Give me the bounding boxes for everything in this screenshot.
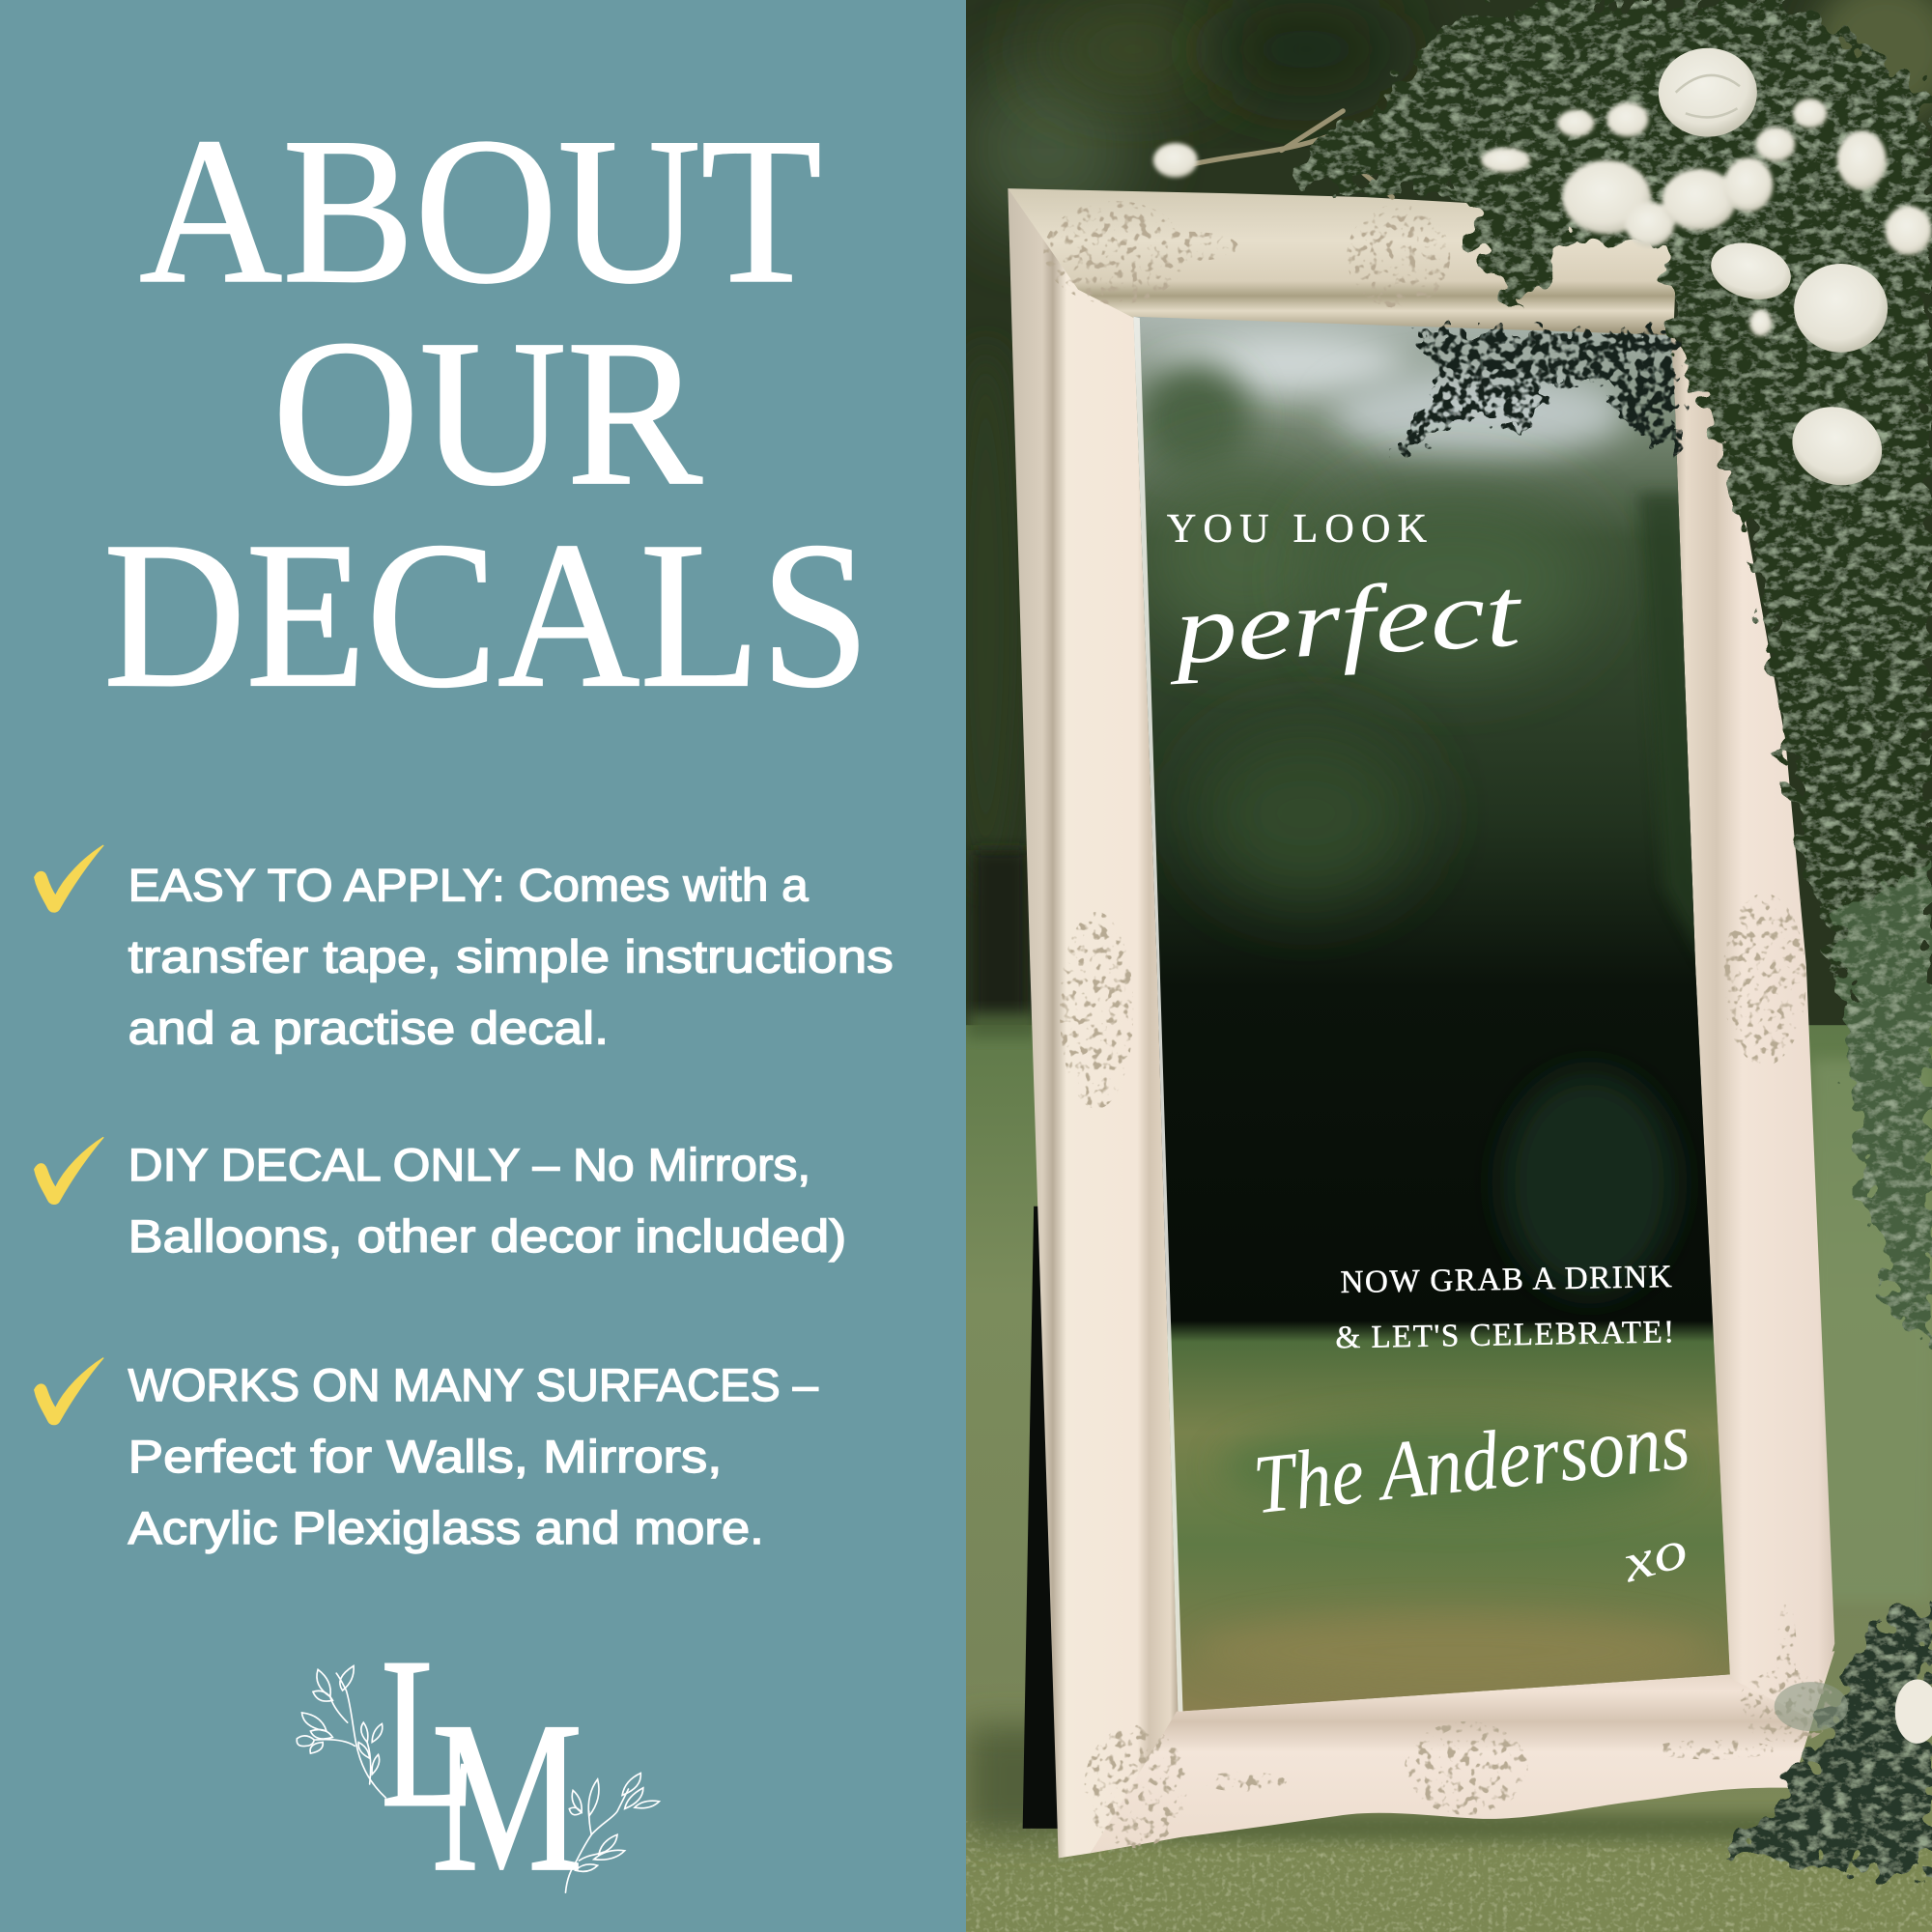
- decal: now grab a drink: NOW GRAB A DRINK: [1340, 1259, 1672, 1300]
- flower: pale rose upper: [1705, 235, 1797, 308]
- photo background: trees: [949, 0, 1932, 1109]
- logo sprig: left: [297, 1665, 385, 1798]
- frame right rail: [1665, 327, 1834, 1719]
- branch reflection in mirror: [1390, 330, 1678, 462]
- icon: yellow check 3: [35, 1358, 103, 1425]
- title: about our decals: ABOUT: [139, 95, 822, 327]
- icon: yellow check 2: [35, 1137, 103, 1204]
- feature text: easy to apply: EASY TO APPLY: Comes with a: [128, 860, 810, 911]
- panel: left teal background: [0, 0, 966, 1932]
- flower: rose lower: [1781, 394, 1893, 497]
- hanging fronds: [1836, 863, 1932, 1343]
- feature text: works on many surfaces: [128, 1360, 819, 1554]
- decal: the andersons script: The Andersons: [1249, 1393, 1693, 1531]
- mirror decal text: [1165, 506, 1694, 1595]
- easel shadow behind the mirror: [1022, 1206, 1058, 1829]
- feature text: easy to apply: [128, 860, 894, 1054]
- title: about our decals: [103, 95, 870, 730]
- flower: large rose: [1659, 48, 1757, 137]
- feature text: works on many surfaces: Acrylic Plexiglass and more.: [128, 1503, 764, 1554]
- feature text: works on many surfaces: Perfect for Walls, Mirrors,: [128, 1432, 722, 1483]
- feature text: works on many surfaces: WORKS ON MANY SURFACES –: [128, 1360, 819, 1411]
- photo background: grass: [966, 1012, 1932, 1932]
- foliage: ground plant bottom right: [1725, 1602, 1932, 1873]
- frame bottom rail: [1091, 1651, 1834, 1853]
- feature list: [35, 845, 894, 1554]
- decal: you look: YOU LOOK: [1167, 506, 1427, 552]
- mirror glass reflection: [1133, 317, 1730, 1712]
- decal: let's celebrate: & LET'S CELEBRATE!: [1335, 1314, 1675, 1355]
- flower: rose middle: [1794, 264, 1888, 353]
- decal: perfect script: perfect: [1165, 557, 1525, 686]
- mirror frame: [1008, 188, 1834, 1858]
- feature text: diy decal only: DIY DECAL ONLY – No Mirrors,: [128, 1140, 810, 1191]
- frame top rail: [1008, 188, 1678, 337]
- flowers: small blooms: [1153, 99, 1932, 336]
- garland leaf mass: [1293, 0, 1932, 985]
- foliage: garland over frame corner: [1153, 0, 1932, 1343]
- feature text: diy decal only: [128, 1140, 846, 1263]
- icon: yellow check 1: [35, 845, 103, 912]
- logo: LM monogram with sprigs: [297, 1614, 659, 1917]
- frame ornaments: [1043, 201, 1836, 1848]
- feature text: easy to apply: transfer tape, simple instructions: [128, 931, 894, 982]
- decal: xo: xo: [1615, 1519, 1694, 1595]
- feature text: diy decal only: Balloons, other decor included): [128, 1211, 846, 1263]
- garland stems reaching left: [1182, 99, 1441, 197]
- photo: mirror scene: [949, 0, 1932, 1932]
- logo letter M: M: [431, 1678, 582, 1917]
- title: about our decals: DECALS: [103, 498, 870, 730]
- logo letter L: L: [381, 1614, 475, 1853]
- logo sprig: right: [565, 1773, 659, 1892]
- frame left rail: [1008, 188, 1180, 1858]
- mirror bright edge: [1133, 317, 1182, 1712]
- title: about our decals: OUR: [272, 297, 702, 528]
- feature text: easy to apply: and a practise decal.: [128, 1003, 609, 1054]
